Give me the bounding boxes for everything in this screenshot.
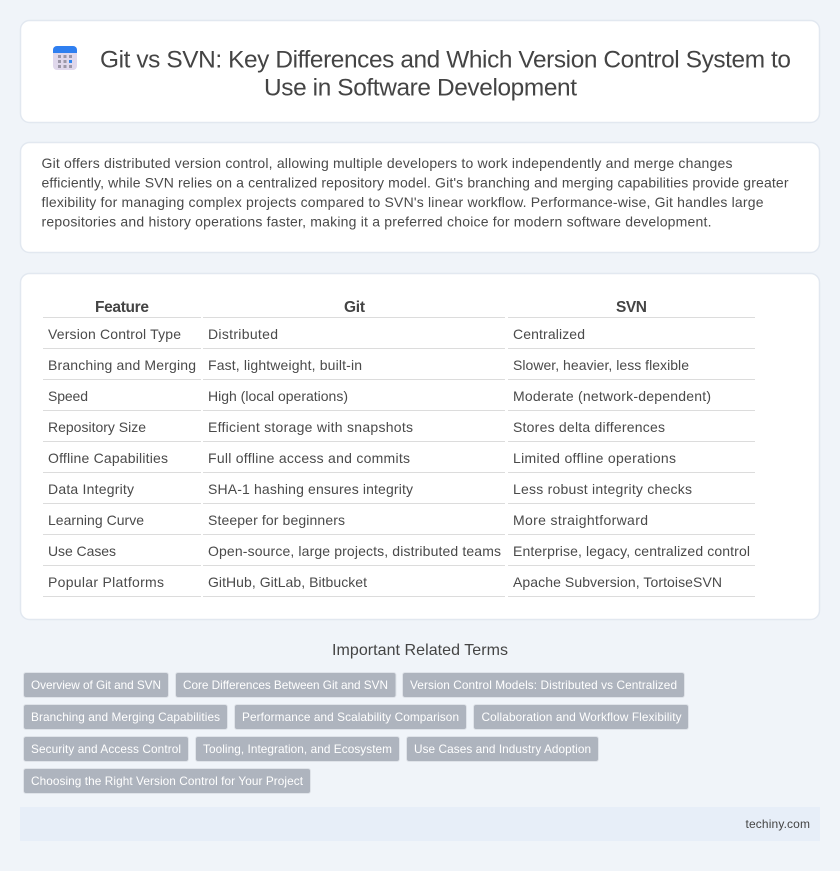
- table header row: SVN: [616, 299, 647, 316]
- table row: offline capabilities: Offline Capabilities: [48, 450, 168, 466]
- table row: repository size: [48, 419, 665, 435]
- table row: use cases: Open-source, large projects, distributed teams: [208, 543, 501, 559]
- related term tags: Overview of Git and SVN: [31, 678, 161, 692]
- table row: branching and merging: Fast, lightweight, built-in: [208, 357, 362, 373]
- table row: data integrity: Data Integrity: [48, 481, 134, 497]
- summary text: repositories and history operations faster, making it a preferred choice for modern software development.: [42, 214, 712, 230]
- table row: popular platforms: Popular Platforms: [48, 574, 164, 590]
- related term tags: Performance and Scalability Comparison: [242, 710, 459, 724]
- table row: learning curve: Steeper for beginners: [208, 512, 345, 528]
- table row: learning curve: Learning Curve: [48, 512, 144, 528]
- related term tags: Collaboration and Workflow Flexibility: [482, 710, 682, 724]
- related term tags: Branching and Merging Capabilities: [31, 710, 220, 724]
- table row: popular platforms: [48, 574, 722, 590]
- table row: popular platforms: Apache Subversion, TortoiseSVN: [513, 574, 722, 590]
- heading: related terms: Important Related Terms: [332, 642, 508, 659]
- related term tags: Core Differences Between Git and SVN: [183, 678, 388, 692]
- table row: speed: [48, 388, 711, 404]
- table row: speed: High (local operations): [208, 388, 348, 404]
- panel: title header: [20, 20, 820, 122]
- table header row: [95, 299, 647, 316]
- table row: popular platforms: GitHub, GitLab, Bitbucket: [208, 574, 367, 590]
- related term tags: Security and Access Control: [31, 742, 181, 756]
- related term tags: Choosing the Right Version Control for Your Project: [31, 774, 304, 788]
- icon: calendar grid: [53, 46, 77, 70]
- table row: data integrity: [48, 481, 692, 497]
- table row: version control type: [48, 326, 585, 342]
- table row: speed: Speed: [48, 388, 88, 404]
- table row: use cases: Enterprise, legacy, centralized control: [513, 543, 750, 559]
- table row: speed: Moderate (network-dependent): [513, 388, 711, 404]
- title: Git vs SVN: Key Differences and Which Version Control System to: [100, 46, 791, 74]
- table row: version control type: Distributed: [208, 326, 278, 342]
- footer bar: techiny.com: [746, 817, 810, 831]
- related term tags: [24, 672, 688, 794]
- table header row: Git: [344, 299, 365, 316]
- table row: learning curve: [48, 512, 648, 528]
- table row: branching and merging: Branching and Merging: [48, 357, 196, 373]
- table row: offline capabilities: Limited offline operations: [513, 450, 676, 466]
- table row: use cases: Use Cases: [48, 543, 116, 559]
- related term tags: Use Cases and Industry Adoption: [414, 742, 591, 756]
- table row: repository size: Repository Size: [48, 419, 146, 435]
- table header row: Feature: [95, 299, 149, 316]
- panel: summary: [20, 142, 820, 252]
- table row: version control type: Version Control Type: [48, 326, 181, 342]
- related term tags: Tooling, Integration, and Ecosystem: [203, 742, 392, 756]
- summary text: Git offers distributed version control, allowing multiple developers to work independently and merge changes: [42, 155, 732, 171]
- table row: repository size: Efficient storage with snapshots: [208, 419, 413, 435]
- related term tags: Version Control Models: Distributed vs Centralized: [410, 678, 677, 692]
- table row: branching and merging: [48, 357, 689, 373]
- title: Use in Software Development: [264, 74, 577, 102]
- table row: data integrity: SHA-1 hashing ensures integrity: [208, 481, 413, 497]
- table row: branching and merging: Slower, heavier, less flexible: [513, 357, 689, 373]
- table row: data integrity: Less robust integrity checks: [513, 481, 692, 497]
- summary text: efficiently, while SVN relies on a centralized repository model. Git's branching and merging capabilities provide greater: [42, 174, 789, 190]
- table row: use cases: [48, 543, 750, 559]
- table row: repository size: Stores delta differences: [513, 419, 665, 435]
- table row: offline capabilities: Full offline access and commits: [208, 450, 410, 466]
- footer bar: [20, 807, 820, 841]
- table row: version control type: Centralized: [513, 326, 585, 342]
- summary text: flexibility for managing complex projects compared to SVN's linear workflow. Performance-wise, Git handles large: [42, 194, 764, 210]
- panel: comparison table: [20, 274, 820, 620]
- table row: learning curve: More straightforward: [513, 512, 648, 528]
- table row: offline capabilities: [48, 450, 676, 466]
